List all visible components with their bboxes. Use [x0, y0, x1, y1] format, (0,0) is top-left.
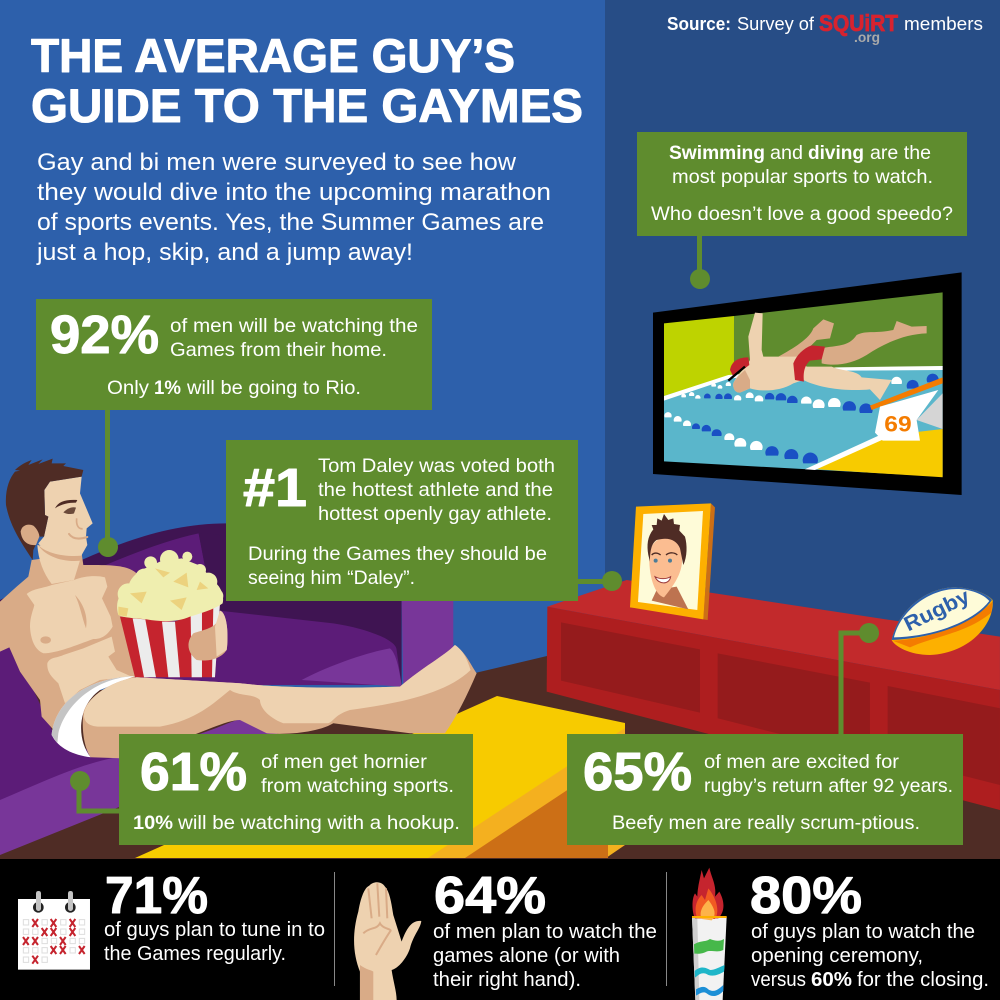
icon: torch	[692, 868, 727, 1000]
icon: calendar	[18, 891, 90, 970]
connector: rugby callout	[841, 623, 879, 734]
man: face details	[55, 500, 77, 508]
man: head	[38, 477, 93, 555]
title: THE AVERAGE GUY’S	[31, 29, 515, 82]
tv: lane number sign	[875, 390, 938, 441]
callout: 61% hornier: 10%	[133, 812, 173, 834]
stat: 80% ceremony: versus	[751, 969, 806, 991]
callout: 61% hornier: from watching sports.	[261, 775, 454, 797]
callout: 92% at home: will be going to Rio.	[186, 377, 361, 399]
stat: 64% alone: their right hand).	[433, 969, 581, 991]
callout: 92% at home: of men will be watching the	[170, 315, 418, 337]
stat: 80% ceremony	[750, 867, 989, 991]
callout: 61% hornier	[119, 734, 473, 845]
intro paragraph: Gay and bi men were surveyed to see how	[37, 149, 516, 176]
man with popcorn	[0, 459, 477, 758]
callout: swimming and diving: Who doesn’t love a good speedo?	[651, 203, 953, 225]
callout: 65% rugby	[567, 734, 963, 845]
callout: swimming and diving: Swimming	[669, 142, 765, 164]
callout: #1 Tom Daley: Tom Daley was voted both	[318, 455, 555, 477]
connector: top callout	[690, 236, 710, 289]
picture frame: Tom Daley	[630, 503, 715, 620]
stat: 64% alone: of men plan to watch the	[433, 921, 657, 943]
man: torso	[0, 553, 143, 733]
bottom band	[0, 859, 1000, 1000]
floor	[0, 656, 1000, 860]
callout: swimming and diving	[637, 132, 967, 236]
man: underwear	[52, 676, 135, 757]
callout: 92% at home: 92%	[50, 305, 159, 365]
callout: 65% rugby: 65%	[583, 742, 692, 802]
intro paragraph	[36, 149, 551, 266]
icon: right hand	[354, 882, 421, 1000]
title: GUIDE TO THE GAYMES	[31, 79, 583, 132]
sofa	[0, 523, 453, 855]
stat: 80% ceremony: 60%	[811, 969, 852, 991]
callout: swimming and diving: most popular sports to watch.	[672, 166, 933, 188]
tv: lane buoys	[664, 377, 902, 450]
stat: 64% alone	[433, 867, 657, 991]
stat: 80% ceremony: 80%	[750, 867, 862, 925]
rugby ball	[892, 585, 993, 655]
stat: 64% alone: 64%	[434, 867, 546, 925]
man: neck	[37, 545, 82, 584]
man: chest muscles	[27, 576, 113, 653]
callout: 61% hornier: 61%	[140, 742, 247, 802]
callout: #1 Tom Daley: seeing him “Daley”.	[248, 567, 415, 589]
stat: 80% ceremony: opening ceremony,	[751, 945, 923, 967]
stat: 80% ceremony: of guys plan to watch the	[751, 921, 975, 943]
callout: 61% hornier: of men get hornier	[261, 751, 428, 773]
yellow ottoman	[135, 696, 625, 858]
callout: 92% at home	[36, 299, 432, 410]
background: left wall	[0, 0, 605, 860]
popcorn bucket	[117, 550, 223, 677]
callout: 92% at home: Only	[107, 377, 149, 399]
callout: swimming and diving: and	[770, 142, 803, 164]
connector: Tom Daley callout	[578, 571, 622, 591]
intro paragraph: they would dive into the upcoming marathon	[37, 179, 551, 206]
callout: 92% at home: 1%	[154, 377, 181, 399]
man: leg	[83, 645, 477, 758]
callout: #1 Tom Daley: the hottest athlete and the	[318, 479, 553, 501]
callout: #1 Tom Daley: During the Games they should be	[248, 543, 547, 565]
connector: home stat	[98, 405, 118, 557]
callout: #1 Tom Daley: hottest openly gay athlete.	[318, 503, 552, 525]
callout: swimming and diving: diving	[808, 142, 864, 164]
background: right wall	[605, 0, 1000, 860]
callout: 65% rugby: rugby’s return after 92 years.	[704, 775, 953, 797]
stat: 71% tune in: the Games regularly.	[104, 943, 286, 965]
stat: 80% ceremony: for the closing.	[857, 969, 989, 991]
television	[653, 272, 962, 495]
source line	[667, 10, 983, 45]
source line: Survey of	[737, 14, 815, 34]
source line: SQUiRT	[819, 10, 898, 36]
intro paragraph: just a hop, skip, and a jump away!	[36, 239, 413, 266]
intro paragraph: of sports events. Yes, the Summer Games are	[37, 209, 544, 236]
source line: .org	[854, 29, 880, 45]
connector: hornier callout	[70, 771, 119, 811]
source line: Source:	[667, 14, 731, 34]
stat: 71% tune in	[104, 867, 325, 965]
man: hair	[6, 459, 83, 560]
callout: #1 Tom Daley: #1	[243, 458, 307, 518]
title	[31, 29, 583, 132]
callout: swimming and diving: are the	[870, 142, 931, 164]
callout: 65% rugby: of men are excited for	[704, 751, 900, 773]
tv: swimmer	[728, 313, 927, 400]
TV console	[547, 580, 1000, 810]
callout: #1 Tom Daley	[226, 440, 578, 601]
rugby ball: Rugby	[900, 585, 974, 636]
tv: lane number sign: 69	[884, 412, 912, 437]
callout: 92% at home: Games from their home.	[170, 339, 387, 361]
stat: 71% tune in: of guys plan to tune in to	[104, 919, 325, 941]
stat: 64% alone: games alone (or with	[433, 945, 620, 967]
source line: members	[904, 14, 983, 34]
stat: 71% tune in: 71%	[105, 867, 208, 925]
man: hand	[188, 611, 228, 661]
callout: 61% hornier: will be watching with a hookup.	[177, 812, 460, 834]
callout: 65% rugby: Beefy men are really scrum-ptious.	[612, 812, 920, 834]
